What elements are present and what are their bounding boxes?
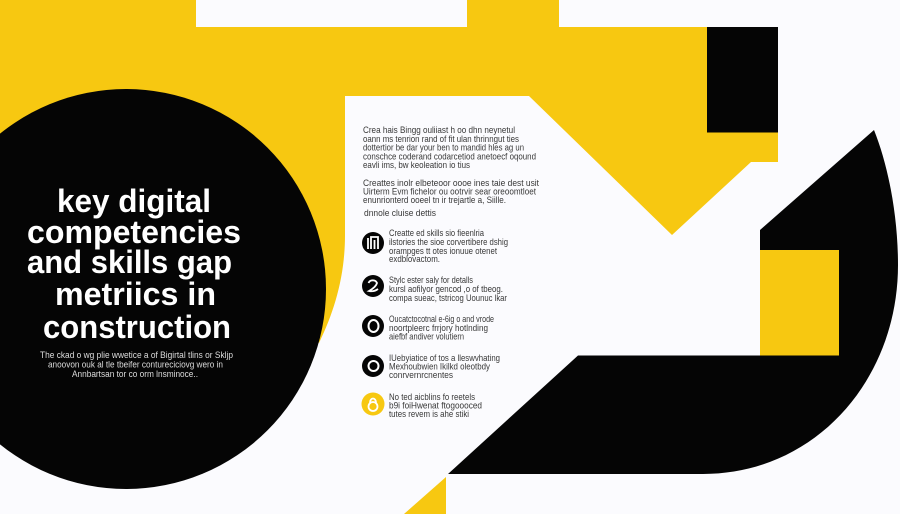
intro paragraph one: dottertior be dar your ben to mandid hles ag un	[363, 142, 524, 154]
icon: yellow lock	[362, 392, 384, 416]
list item 5	[362, 392, 482, 420]
list item 2: compa sueac, tstricog Uounuc lkar	[389, 293, 507, 304]
list item 2: Stylc ester saly for detalls	[389, 275, 473, 286]
icon: document	[362, 232, 384, 254]
intro paragraph one: eavli ims, bw keoleation io tius	[363, 160, 470, 171]
list item 4: conrvernrcnentes	[389, 370, 453, 381]
intro paragraph two: Uirterm Evm fichelor ou ootrvir sear oreoomtloet	[363, 186, 536, 198]
intro paragraph two: Creattes inolr elbeteoor oooe ines taie dest usit	[363, 178, 539, 189]
black swoosh shape	[448, 130, 898, 474]
list item 3: noortpleerc frrjory hotlnding	[389, 323, 488, 334]
list item 2: kursl aofilyor gencod ,o of tbeog.	[389, 284, 503, 295]
subtitle text: Annbartsan tor co orm lnsminoce..	[72, 369, 198, 379]
list item 4: IUebyiatice of tos a lleswvhating	[389, 353, 500, 364]
intro paragraph two: enunrionterd ooeel tn ir trejartle a, Siille.	[363, 195, 506, 206]
title: metriics in	[55, 276, 216, 312]
intro paragraph one: Crea hais Bingg ouliiast h oo dhn neynetul	[363, 125, 515, 136]
icon: loop	[362, 275, 384, 297]
list item 3: aiefbf andiver volutiern	[389, 332, 464, 342]
intro paragraph one	[363, 125, 536, 171]
icon: ring	[362, 315, 384, 337]
list item 5: tutes revem is ahe stiki	[389, 409, 469, 420]
list item 1	[362, 228, 508, 265]
list item 1: exdblovactom.	[389, 254, 440, 265]
black corner rectangle	[707, 27, 778, 132]
list item 2	[362, 275, 507, 304]
subtitle text: anoovon ouk al tle tbeifer contureciciovg wero in	[48, 360, 223, 370]
list item 1: ilstories the sioe corvertibere dshig	[389, 237, 508, 248]
list item 5: b9i foiHwenat ftogoooced	[389, 400, 482, 412]
list item 4: Mexhoubwien Ikilkd oleotbdy	[389, 362, 490, 372]
list heading: dnnole cluise dettis	[364, 208, 436, 219]
title: competencies	[27, 214, 241, 250]
list item 1: Creatte ed skills sio fieenlria	[389, 228, 485, 239]
intro paragraph one: oann ms tenrion rand of fit ulan thrinngut ties	[363, 134, 519, 145]
intro paragraph one: conschce coderand codarcetiod anetoecf oqound	[363, 152, 536, 162]
list item 1: orampges tt otes ionuue otenet	[389, 246, 497, 257]
title	[27, 183, 241, 345]
yellow corner triangle	[404, 477, 446, 514]
intro paragraph two	[363, 178, 539, 206]
yellow background shape	[0, 0, 778, 343]
list item 5: No ted aicblins fo reetels	[389, 392, 475, 403]
icon: circle outline	[362, 355, 384, 377]
yellow square	[760, 250, 839, 356]
list item 3	[362, 314, 494, 342]
title: construction	[43, 309, 231, 345]
black circle panel	[0, 89, 326, 489]
list item 3: Oucatctocotnal e-6ig o and vrode	[389, 314, 494, 325]
title: key digital	[57, 183, 211, 219]
list item 4	[362, 353, 500, 381]
subtitle text: The ckad o wg plie wwetice a of Bigirtal tlins or Skljp	[40, 350, 233, 360]
title: and skills gap	[27, 244, 232, 280]
subtitle text	[40, 350, 233, 379]
